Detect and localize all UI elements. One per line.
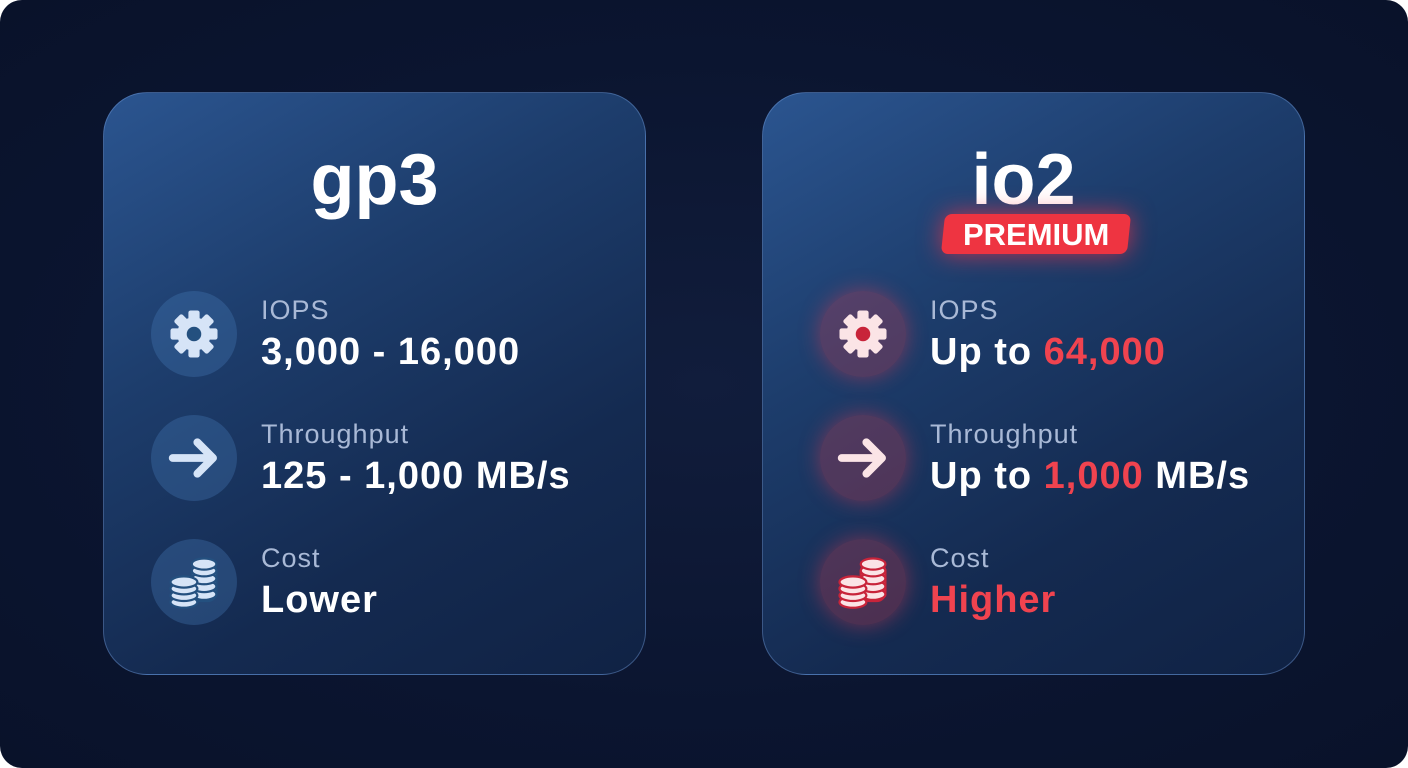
icon: gear red: [820, 291, 906, 377]
row: IOPS: Up to 64,000: [930, 331, 1166, 373]
badge: PREMIUM: [941, 214, 1131, 254]
icon: coins red: [820, 539, 906, 625]
row: Cost: Higher: [930, 579, 1056, 621]
row: Throughput: [151, 415, 571, 501]
row: IOPS: [151, 291, 520, 377]
row: Throughput: Throughput: [261, 419, 409, 449]
icon: arrow red: [820, 415, 906, 501]
icon: coins: [151, 539, 237, 625]
row: IOPS: IOPS: [930, 295, 999, 325]
row: Throughput: Throughput: [930, 419, 1078, 449]
row: Throughput: [808, 402, 1250, 514]
icon: gear: [151, 291, 237, 377]
row: IOPS: [808, 278, 1166, 390]
row: Cost: Cost: [930, 543, 990, 573]
panel: gp3: [103, 92, 646, 675]
row: Cost: Lower: [261, 579, 378, 621]
row: IOPS: IOPS: [261, 295, 330, 325]
row: Cost: [151, 539, 378, 625]
icon: arrow: [151, 415, 237, 501]
title: io2: io2: [971, 140, 1076, 220]
row: Cost: Cost: [261, 543, 321, 573]
row: Cost: [807, 526, 1056, 638]
badge: PREMIUM: PREMIUM: [963, 217, 1109, 252]
row: IOPS: 3,000 - 16,000: [261, 331, 520, 373]
row: Throughput: Up to 1,000 MB/s: [930, 455, 1250, 497]
panel: io2: [762, 92, 1305, 675]
title: gp3: gp3: [310, 140, 438, 220]
row: Throughput: 125 - 1,000 MB/s: [261, 455, 571, 497]
